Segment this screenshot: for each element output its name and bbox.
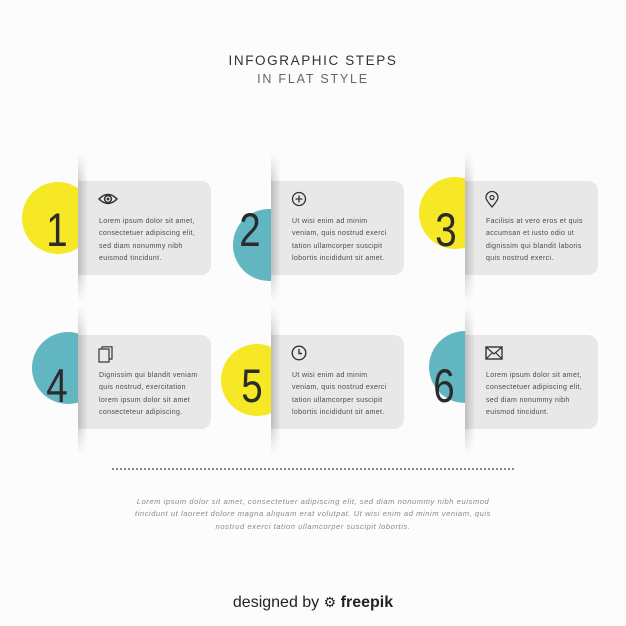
circle 1: 1 [46,203,68,256]
step 3 [419,158,598,296]
circle 3 [419,177,465,256]
card 5: tation ullamcorper suscipit [292,397,382,404]
title [228,53,397,86]
icon: eye [98,194,118,204]
footer text: Lorem ipsum dolor sit amet, consectetuer adipiscing elit, sed diam nonummy nibh euismod [137,497,489,506]
card 3 [465,181,598,275]
card 3: dignissim qui blandit laboris [486,243,582,250]
card 5: Ut wisi enim ad minim [292,372,367,379]
step 1 [22,158,211,296]
circle 4: 4 [46,359,68,412]
card 2: Ut wisi enim ad minim [292,218,367,225]
circle 4 [32,332,78,412]
card 6 [465,335,598,429]
card 1: Lorem ipsum dolor sit amet, [99,218,195,225]
footer text [135,497,491,531]
circle 6: 6 [433,359,455,412]
circle 5 [221,344,271,416]
card 4 [78,335,211,429]
step 4 [32,310,211,450]
title: INFOGRAPHIC STEPS [228,53,397,68]
icon: documents [98,346,113,363]
card 4: consecteteur adipiscing. [99,409,182,416]
card 6: Lorem ipsum dolor sit amet, [486,372,582,379]
card 5: veniam, quis nostrud exerci [292,384,387,391]
step 6 [429,310,598,450]
card 2: tation ullamcorper suscipit [292,243,382,250]
card 1: sed diam nonummy nibh [99,243,183,250]
card 5: lobortis incididunt sit amet. [292,409,385,416]
card 6: consectetuer adipiscing elit, [486,384,582,391]
credit: designed by freepik: designed by ⚙ freepik [233,594,393,611]
icon: clock [292,346,306,360]
card 1 [78,181,211,275]
card 4: lorem ipsum dolor sit amet [99,397,190,404]
circle 5: 5 [241,359,263,412]
circle 3: 3 [435,203,457,256]
footer text: tincidunt ut laoreet dolore magna aliquam erat volutpat. Ut wisi enim ad minim veniam, quis [135,509,491,518]
icon: plus [292,192,306,206]
card 2: veniam, quis nostrud exerci [292,230,387,237]
card 2 [271,181,404,275]
card 1: consectetuer adipiscing elit, [99,230,195,237]
card 2: lobortis incididunt sit amet. [292,255,385,262]
step 5 [221,310,404,450]
card 6: sed diam nonummy nibh [486,397,570,404]
card 4: Dignissim qui blandit veniam [99,372,198,379]
card 6: euismod tincidunt. [486,409,549,416]
circle 2 [233,203,271,281]
card 3: accumsan et iusto odio ut [486,230,574,237]
card 3: Facilisis at vero eros et quis [486,218,583,225]
card 4: quis nostrud, exercitation [99,384,186,391]
card 1: euismod tincidunt. [99,255,162,262]
title: IN FLAT STYLE [257,72,369,86]
circle 2: 2 [239,203,261,256]
footer text: nostrud exerci tation ullamcorper suscipit lobortis. [216,522,410,531]
circle 1 [22,182,78,256]
card 5 [271,335,404,429]
card 3: quis nostrud exerci. [486,255,554,262]
icon: map pin [485,190,499,208]
step 2 [233,158,404,296]
icon: envelope [485,346,503,360]
circle 6 [429,331,465,412]
